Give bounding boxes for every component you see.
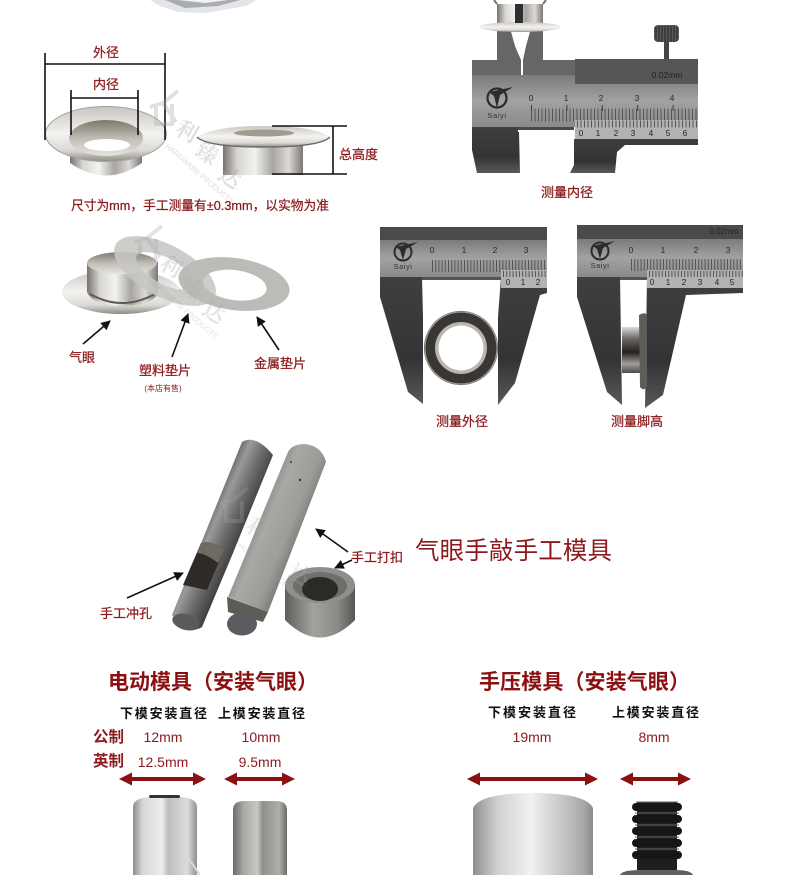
metal washer <box>175 250 293 318</box>
watermark 3: HARDWARE PRODUCTS <box>234 539 306 603</box>
eyelet <box>62 252 180 314</box>
outer diameter dimension: 外径 <box>93 45 119 60</box>
column headers: 上模安装直径 <box>218 706 305 721</box>
arrow: hand punch <box>127 573 183 598</box>
lower jaws <box>472 127 520 173</box>
metric and imperial sizes: 12.5mm <box>138 754 188 770</box>
width arrow: lower die <box>119 772 206 786</box>
label: plastic washer: 塑料垫片 <box>139 363 191 378</box>
ticks: 1 <box>462 245 467 255</box>
label: in stock note: (本店有售) <box>144 383 182 393</box>
sizes: 19mm <box>513 729 551 745</box>
metric and imperial sizes <box>138 729 281 770</box>
ticks: 1 <box>661 245 666 255</box>
lower die <box>473 793 593 875</box>
total height dimension: 总高度 <box>339 147 378 162</box>
main scale ticks: 2 <box>599 93 604 103</box>
vernier: 0 <box>650 278 655 287</box>
manual setting rod tool <box>227 444 326 636</box>
caliper: measuring foot height: 0.02mm <box>710 227 739 236</box>
caliper: measuring foot height <box>577 225 743 408</box>
vernier: 2 <box>536 278 541 287</box>
arrow: setter rod <box>316 529 348 552</box>
vernier: 1 <box>596 129 601 138</box>
eyelet side view <box>197 126 330 175</box>
vernier <box>575 120 698 139</box>
watermark 2: HARDWARE PRODUCTS <box>148 277 220 341</box>
main scale ticks <box>529 93 698 115</box>
vernier: 2 <box>682 278 687 287</box>
watermark 1: HARDWARE PRODUCTS <box>164 142 236 206</box>
heading: hand-tap tools: 气眼手敲手工模具 <box>415 537 612 565</box>
arrow: plastic washer <box>172 314 188 357</box>
vernier: 6 <box>683 129 688 138</box>
logo: Saiyi <box>487 111 507 120</box>
watermark 1: 达 <box>214 161 247 195</box>
ticks: 0 <box>629 245 634 255</box>
vernier: 1 <box>666 278 671 287</box>
vernier: 3 <box>698 278 703 287</box>
total height dimension <box>272 126 378 174</box>
watermark 1 <box>150 91 247 206</box>
vernier: 1 <box>521 278 526 287</box>
vernier <box>501 270 547 288</box>
logo: Saiyi <box>394 262 412 271</box>
main scale body <box>472 75 698 127</box>
metric and imperial sizes: 12mm <box>144 729 182 745</box>
row labels: 英制 <box>93 752 124 770</box>
depth knob <box>654 25 679 60</box>
caption: measure outer diameter: 测量外径 <box>436 414 488 429</box>
logo: Saiyi <box>591 261 609 270</box>
sizes <box>513 729 670 745</box>
vernier: 4 <box>715 278 720 287</box>
upper die <box>233 801 287 875</box>
main scale ticks: 1 <box>564 93 569 103</box>
label: metal washer: 金属垫片 <box>254 356 306 371</box>
watermark 2: 臻 <box>175 272 207 305</box>
lower die <box>133 795 197 875</box>
width arrow: lower die <box>467 772 598 786</box>
main scale ticks: 0 <box>529 93 534 103</box>
vernier: 0 <box>579 129 584 138</box>
heading: 手压模具（安装气眼） <box>479 671 690 694</box>
watermark 3 <box>220 488 317 603</box>
metric and imperial sizes: 9.5mm <box>239 754 281 770</box>
inner diameter dimension: 内径 <box>93 77 119 92</box>
caption: measure inner diameter: 测量内径 <box>541 185 593 200</box>
arrow: setter die <box>335 560 352 568</box>
label: hand punch: 手工冲孔 <box>100 606 152 621</box>
manual setting ring die <box>285 567 355 638</box>
label: eyelet: 气眼 <box>69 350 95 365</box>
main scale ticks: 4 <box>670 93 675 103</box>
upper jaws <box>472 28 575 80</box>
panel: hand press die <box>467 671 699 875</box>
heading: 电动模具（安装气眼） <box>108 671 318 694</box>
ticks <box>629 245 743 265</box>
width arrow: upper die <box>224 772 295 786</box>
column headers: 下模安装直径 <box>120 706 207 721</box>
watermark 3: 利 <box>241 512 273 545</box>
caliper: measuring inner diameter <box>472 0 698 173</box>
bottom watermark trace <box>186 855 200 875</box>
arrow: eyelet <box>83 321 110 344</box>
watermark 3: 达 <box>284 558 317 592</box>
vernier: 5 <box>730 278 735 287</box>
arrow: metal washer <box>257 317 279 350</box>
vernier: 2 <box>614 129 619 138</box>
upper die threaded screw <box>620 802 693 875</box>
ticks <box>430 245 547 266</box>
watermark 3: 臻 <box>261 534 293 567</box>
label: hand setter: 手工打扣 <box>351 550 403 565</box>
row labels <box>93 728 124 770</box>
eyelet on jaws <box>479 0 561 32</box>
caliper: measuring outer diameter <box>380 227 547 405</box>
ticks: 2 <box>694 245 699 255</box>
vernier: 4 <box>649 129 654 138</box>
watermark 2 <box>134 226 231 341</box>
top product photo fragment <box>150 0 257 13</box>
eyelet side on <box>622 313 647 389</box>
column headers <box>488 705 699 720</box>
ticks: 2 <box>493 245 498 255</box>
caption: measure foot height: 测量脚高 <box>611 414 663 429</box>
eyelet and washers exploded view <box>62 222 293 320</box>
ticks: 3 <box>524 245 529 255</box>
logo <box>591 241 615 270</box>
logo <box>487 87 513 120</box>
column headers <box>120 706 305 721</box>
vernier: 0 <box>506 278 511 287</box>
ticks: 0 <box>430 245 435 255</box>
eyelet ring <box>424 311 498 385</box>
outer diameter dimension <box>45 45 165 140</box>
eyelet front view <box>46 106 166 176</box>
row labels: 公制 <box>93 728 124 746</box>
metric and imperial sizes: 10mm <box>242 729 280 745</box>
vernier: 5 <box>666 129 671 138</box>
width arrow: upper die <box>620 772 691 786</box>
panel: electric die <box>93 671 318 875</box>
jaws <box>380 277 423 404</box>
logo <box>394 242 418 271</box>
sizes: 8mm <box>638 729 670 745</box>
size note: 尺寸为mm，手工测量有±0.3mm，以实物为准 <box>71 198 329 213</box>
column headers: 上模安装直径 <box>612 705 699 720</box>
slider top <box>575 59 698 84</box>
vernier: 3 <box>631 129 636 138</box>
watermark 1: 利 <box>171 115 203 148</box>
main scale ticks: 3 <box>635 93 640 103</box>
slider top: 0.02mm <box>652 70 682 80</box>
watermark 2: 达 <box>198 296 231 330</box>
vernier <box>647 270 743 288</box>
watermark 2: 利 <box>155 250 187 283</box>
plastic washer <box>103 222 227 320</box>
manual hole punch tool <box>170 440 273 633</box>
watermark 1: 臻 <box>191 137 223 170</box>
column headers: 下模安装直径 <box>488 705 576 720</box>
ticks: 3 <box>726 245 731 255</box>
inner diameter dimension <box>71 77 138 135</box>
jaws <box>577 277 622 405</box>
